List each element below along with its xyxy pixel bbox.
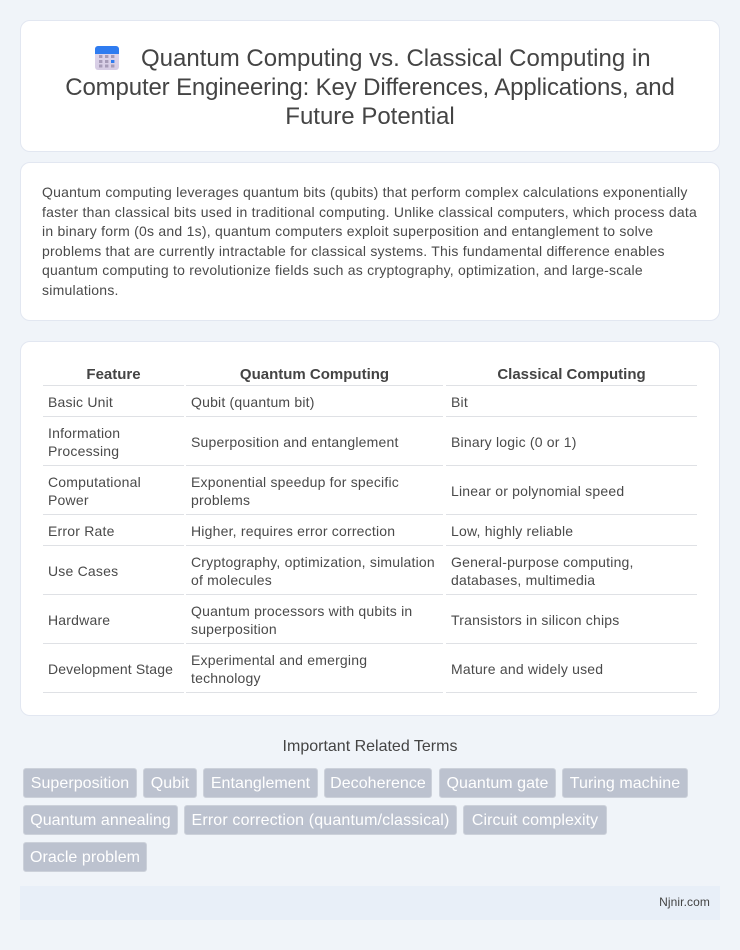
- row: use cases: databases, multimedia: [451, 572, 595, 588]
- row: computational power: Exponential speedup for specific: [191, 474, 399, 490]
- row: hardware: Quantum processors with qubits in: [191, 603, 412, 619]
- title: Computer Engineering: Key Differences, Applications, and: [65, 74, 675, 101]
- text block: description: simulations.: [42, 282, 119, 298]
- row: computational power: Linear or polynomial speed: [451, 483, 624, 499]
- table header: Classical Computing: [497, 366, 646, 383]
- table header: [86, 366, 646, 383]
- title: [65, 45, 675, 130]
- row: information processing: Superposition and entanglement: [191, 434, 399, 450]
- row: basic unit: Qubit (quantum bit): [191, 394, 315, 410]
- row: hardware: Transistors in silicon chips: [451, 612, 619, 628]
- row: error rate: Error Rate: [48, 523, 115, 539]
- text block: description: in binary form (0s and 1s), quantum computers exploit superposition and entanglement to solve: [42, 223, 653, 239]
- row: information processing: Binary logic (0 or 1): [451, 434, 577, 450]
- table header: Feature: [86, 366, 141, 383]
- panel: description: [20, 162, 720, 321]
- footer credit: Njnir.com: [659, 895, 710, 909]
- row: information processing: Processing: [48, 443, 119, 459]
- row: use cases: of molecules: [191, 572, 272, 588]
- row: hardware: superposition: [191, 621, 277, 637]
- text block: description: [42, 184, 697, 298]
- related term tags: Qubit: [151, 775, 189, 792]
- row: computational power: problems: [191, 492, 250, 508]
- related term tags: Circuit complexity: [472, 812, 598, 829]
- heading: related terms: Important Related Terms: [283, 738, 457, 755]
- footer: [20, 886, 720, 920]
- text block: description: Quantum computing leverages quantum bits (qubits) that perform complex calculations exponentially: [42, 184, 688, 200]
- icon: calendar: [95, 46, 119, 70]
- row: information processing: Information: [48, 425, 120, 441]
- row: error rate: Higher, requires error correction: [191, 523, 395, 539]
- title: Quantum Computing vs. Classical Computing in: [141, 45, 651, 72]
- related term tags: Entanglement: [211, 775, 310, 792]
- row: information processing: [48, 425, 577, 459]
- row: error rate: [48, 523, 573, 539]
- row: development stage: Mature and widely used: [451, 661, 603, 677]
- related term tags: Quantum annealing: [30, 812, 171, 829]
- row: computational power: Power: [48, 492, 89, 508]
- row: development stage: [48, 652, 603, 686]
- related term tags: Decoherence: [330, 775, 426, 792]
- panel: comparison table: [20, 341, 720, 716]
- row: use cases: General-purpose computing,: [451, 554, 634, 570]
- related term tags: Turing machine: [570, 775, 680, 792]
- row: development stage: Experimental and emerging: [191, 652, 367, 668]
- row: use cases: Cryptography, optimization, simulation: [191, 554, 435, 570]
- row: computational power: Computational: [48, 474, 141, 490]
- row: use cases: Use Cases: [48, 563, 118, 579]
- row: error rate: Low, highly reliable: [451, 523, 573, 539]
- row: computational power: [48, 474, 624, 508]
- table header: Quantum Computing: [240, 366, 389, 383]
- title: Future Potential: [285, 103, 455, 130]
- related term tags: Error correction (quantum/classical): [192, 812, 449, 829]
- row: basic unit: Bit: [451, 394, 468, 410]
- panel: header: [20, 20, 720, 152]
- row: development stage: Development Stage: [48, 661, 173, 677]
- row: use cases: [48, 554, 634, 588]
- text block: description: problems that are currently intractable for classical systems. This fundamental difference enables: [42, 242, 665, 258]
- text block: description: faster than classical bits used in traditional computing. Unlike classical computers, which process data: [42, 204, 697, 220]
- row: hardware: Hardware: [48, 612, 110, 628]
- related term tags: [23, 768, 688, 872]
- row: hardware: [48, 603, 619, 637]
- row: basic unit: Basic Unit: [48, 394, 113, 410]
- comparison table: [43, 366, 697, 693]
- related term tags: Quantum gate: [446, 775, 548, 792]
- row: basic unit: [48, 394, 468, 410]
- row: development stage: technology: [191, 670, 261, 686]
- text block: description: quantum computing to revolutionize fields such as cryptography, optimization, and large-scale: [42, 262, 643, 278]
- related term tags: Superposition: [31, 775, 129, 792]
- related term tags: Oracle problem: [30, 849, 140, 866]
